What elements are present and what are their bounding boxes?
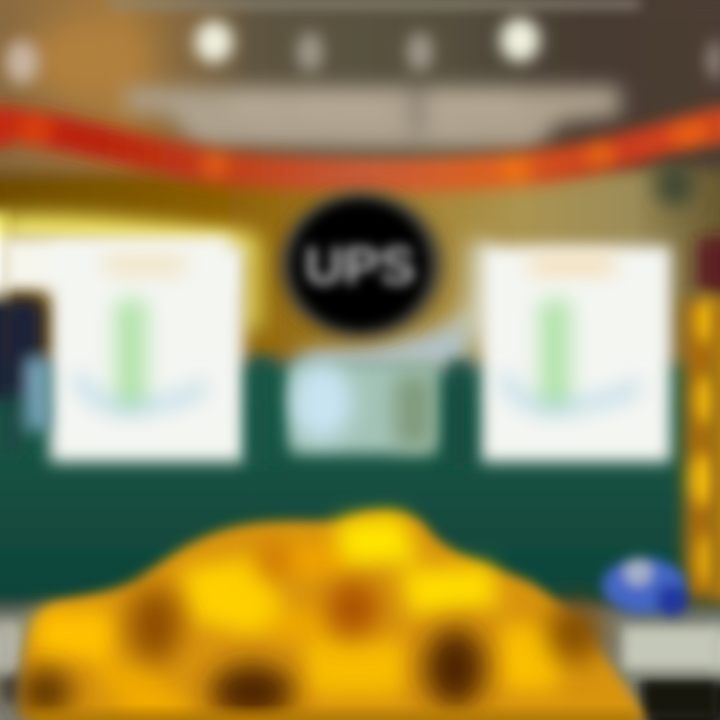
title — [125, 83, 620, 150]
right chart panel — [481, 246, 671, 462]
title: Stock Performance — [251, 119, 469, 146]
title: UPS Market Overview — [231, 83, 519, 114]
lower right table — [0, 622, 720, 720]
dark pillars — [250, 358, 274, 466]
black UPS logo circle — [280, 192, 442, 338]
blue ball — [602, 558, 688, 616]
gold coin pile — [17, 511, 645, 720]
dark corner shape — [655, 163, 695, 207]
pile shadows — [327, 580, 379, 636]
top strip — [110, 0, 640, 8]
left chart panel — [0, 236, 244, 462]
left chart line — [78, 375, 205, 409]
right chart line — [505, 375, 640, 409]
black UPS logo circle: UPS — [304, 236, 416, 296]
bottom edge fill — [26, 706, 720, 720]
right gold column — [684, 238, 720, 600]
ceiling lights — [5, 18, 720, 84]
left chart heading — [105, 258, 185, 272]
pile highlights — [180, 555, 290, 635]
left figure — [0, 298, 48, 455]
yellow glow strip — [0, 215, 490, 345]
red banner — [0, 116, 720, 184]
right edge fill — [706, 98, 720, 720]
right chart heading — [530, 258, 615, 272]
ceiling glow — [30, 20, 150, 100]
center light panel — [250, 322, 470, 466]
left edge fill — [0, 110, 16, 670]
left chart bar — [116, 300, 146, 410]
right chart bar — [540, 300, 570, 410]
